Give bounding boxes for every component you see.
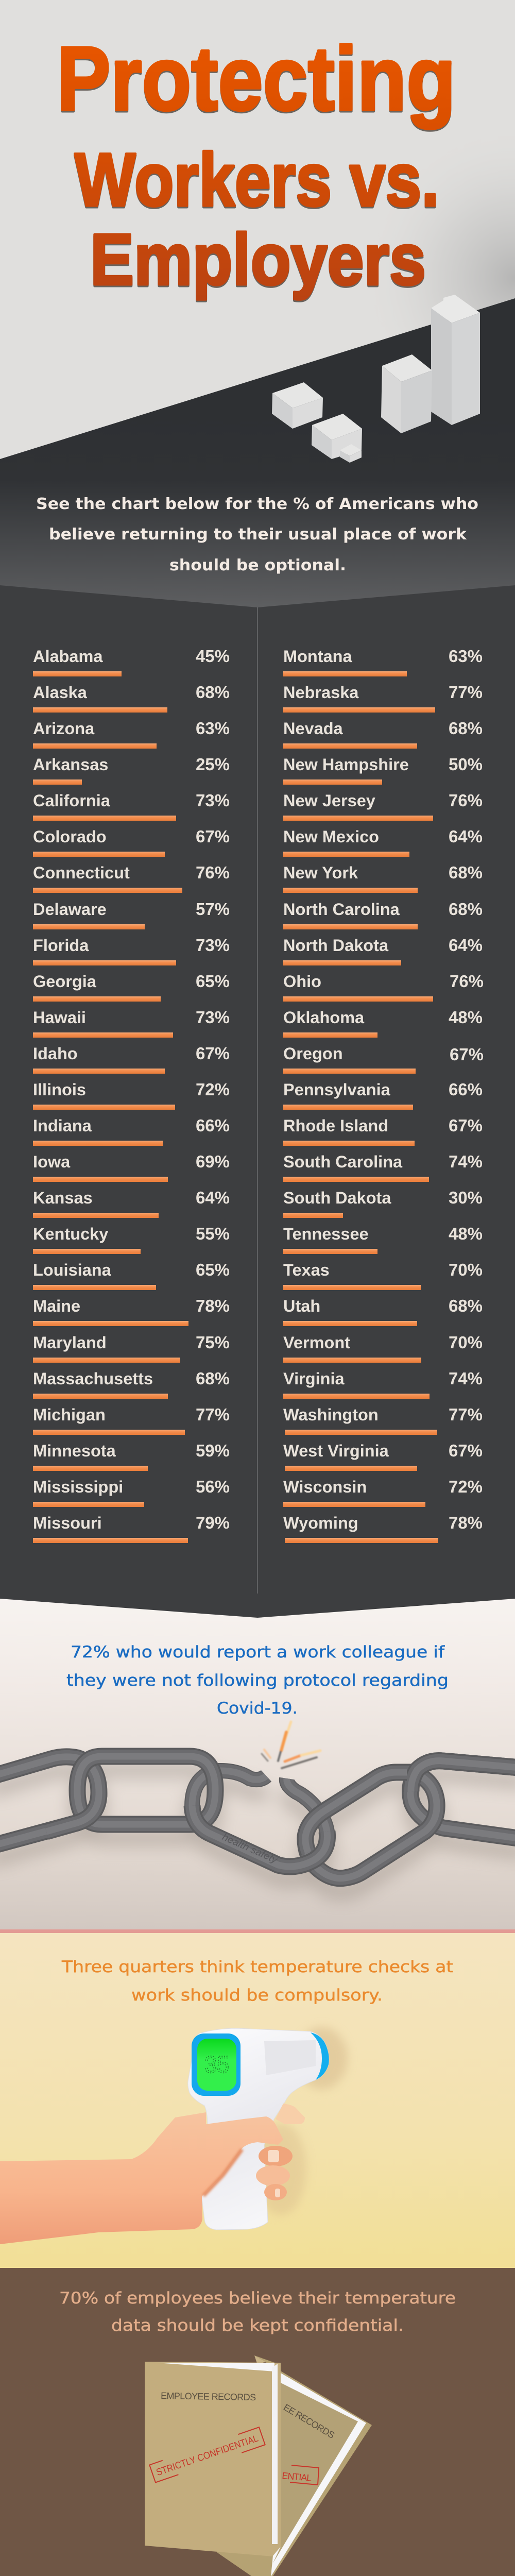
panel: state chart [0,585,515,1618]
icon: broken chain [0,1756,515,1892]
row: Pennsylvania: 66% [449,1080,483,1099]
heading: report a colleague: they were not following protocol regarding [66,1671,449,1690]
row: Indiana: 66% [196,1116,230,1135]
row: Alaska: 68% [196,683,230,702]
row: Nebraska: Nebraska [283,683,359,702]
row: Maryland: Maryland [33,1333,107,1352]
row: Pennsylvania: Pennsylvania [283,1080,391,1099]
row: Vermont [283,1333,483,1363]
icon: employee record folders: EMPLOYEE RECORDS [161,2391,256,2402]
row: Arkansas: Arkansas [33,755,108,774]
row: West Virginia: 67% [449,1441,483,1460]
row: Georgia: Georgia [33,972,97,991]
row: Minnesota: 59% [196,1441,230,1460]
row: South Dakota: South Dakota [283,1189,391,1207]
row: Nevada: Nevada [283,719,344,738]
row: Wyoming: Wyoming [283,1514,358,1532]
row: South Carolina [283,1152,483,1182]
row: West Virginia [283,1441,483,1471]
row: California: California [33,791,111,810]
row: Wisconsin [283,1477,483,1507]
row: Oklahoma [283,1008,483,1038]
row: West Virginia: West Virginia [283,1442,389,1460]
row: Ohio: Ohio [283,972,321,991]
row: Idaho: Idaho [33,1044,78,1063]
row: Tennessee: 48% [449,1224,483,1243]
row: Kansas: Kansas [33,1189,93,1207]
row: Massachusetts [33,1369,230,1399]
row: North Dakota [283,936,483,965]
row: Vermont: Vermont [283,1333,350,1352]
row: Missouri [33,1513,230,1543]
row: Alabama: 45% [196,647,230,666]
row: North Dakota: North Dakota [283,936,389,955]
row: Indiana: Indiana [33,1116,92,1135]
row: Arizona: Arizona [33,719,95,738]
row: Ohio [283,972,484,1002]
row: New Jersey [283,791,483,821]
intro text [36,495,478,574]
row: Mississippi: 56% [196,1477,230,1496]
row: Florida: Florida [33,936,89,955]
row: Utah: Utah [283,1297,320,1315]
row: Washington: Washington [283,1405,379,1424]
header background [0,0,515,618]
row: Michigan: Michigan [33,1405,106,1424]
row: South Dakota [283,1188,483,1218]
title: Employers [90,218,426,300]
row: California [33,791,230,821]
heading: report a colleague [66,1643,449,1718]
row: South Dakota: 30% [449,1188,483,1207]
row: Alabama: Alabama [33,647,103,666]
row: Missouri: 79% [196,1513,230,1532]
row: Connecticut [33,863,230,893]
row: Washington [283,1405,483,1435]
icon: hand holding thermometer [0,2027,348,2244]
row: Michigan: 77% [196,1405,230,1424]
row: Arizona: 63% [196,719,230,738]
row: Oklahoma: 48% [449,1008,483,1027]
row: New Mexico: New Mexico [283,827,379,846]
row: Pennsylvania [283,1080,483,1110]
row: Montana: Montana [283,647,353,666]
title [57,28,456,300]
row: Tennessee [283,1224,483,1254]
isometric bar blocks [272,295,480,463]
row: South Carolina: South Carolina [283,1153,403,1171]
row: Maine: Maine [33,1297,80,1315]
row: Wisconsin: 72% [449,1477,483,1496]
row: Iowa: 69% [196,1152,230,1171]
row: Utah: 68% [449,1296,483,1315]
row: Indiana [33,1116,230,1146]
panel: temperature section [0,1933,515,2268]
row: Massachusetts: 68% [196,1369,230,1388]
heading: temperature checks: Three quarters think temperature checks at [61,1958,453,1976]
row: Rhode Island: Rhode Island [283,1116,388,1135]
row: Hawaii: 73% [196,1008,230,1027]
row: North Carolina: 68% [449,900,483,919]
row: Kansas [33,1188,230,1218]
row: Iowa [33,1152,230,1182]
row: Arkansas [33,755,230,785]
icon: employee record folders: EE RECORDS [282,2402,336,2441]
heading: temperature checks [61,1958,453,2005]
row: Minnesota: Minnesota [33,1442,116,1460]
row: Missouri: Missouri [33,1514,102,1532]
row: Wisconsin: Wisconsin [283,1478,367,1496]
row: New Jersey: 76% [449,791,483,810]
icon: hand holding thermometer: 35 [204,2051,229,2078]
row: Virginia: Virginia [283,1369,345,1388]
row: Nevada: 68% [449,719,483,738]
row: Tennessee: Tennessee [283,1225,369,1243]
row: Montana: 63% [449,647,483,666]
row: Nebraska: 77% [449,683,483,702]
row: Florida [33,936,230,965]
icon: broken chain: health safety [220,1832,280,1866]
divider band [0,1929,515,1933]
row: Arizona [33,719,230,749]
row: Delaware: Delaware [33,900,107,919]
row: Georgia [33,972,230,1002]
row: North Dakota: 64% [449,936,483,955]
row: New York [283,863,483,893]
row: Oregon: 67% [450,1045,484,1064]
icon: employee record folders: ENTIAL [282,2470,312,2483]
row: Oregon [283,1044,484,1074]
heading: report a colleague: Covid-19. [217,1699,298,1718]
row: Maine: 78% [196,1296,230,1315]
icon: employee record folders [145,2355,372,2576]
row: North Carolina [283,900,483,929]
heading: data confidential [59,2289,456,2335]
row: Alaska [33,683,230,713]
row: New Hampshire: 50% [449,755,483,774]
row: California: 73% [196,791,230,810]
row: Kentucky: 55% [196,1224,230,1243]
row: Louisiana: Louisiana [33,1261,112,1279]
row: Louisiana: 65% [196,1260,230,1279]
row: New Hampshire [283,755,483,785]
row: Oklahoma: Oklahoma [283,1008,365,1027]
panel: confidential section [0,2268,515,2576]
row: Maryland [33,1333,230,1363]
row: Nevada [283,719,483,749]
intro text: See the chart below for the % of Americans who [36,495,478,513]
row: Rhode Island: 67% [449,1116,483,1135]
dark slanted floor [0,298,515,618]
row: Mississippi [33,1477,230,1507]
row: Hawaii: Hawaii [33,1008,86,1027]
row: Massachusetts: Massachusetts [33,1369,153,1388]
row: Kentucky [33,1224,230,1254]
row: Kentucky: Kentucky [33,1225,108,1243]
heading: data confidential: data should be kept confidential. [111,2316,404,2335]
row: New York: New York [283,863,358,882]
title: Protecting [57,28,456,129]
row: Virginia [283,1369,483,1399]
row: New Mexico [283,827,483,857]
row: Idaho [33,1044,230,1074]
row: Wyoming [283,1513,483,1543]
row: New Jersey: New Jersey [283,791,375,810]
row: Texas: Texas [283,1261,330,1279]
row: Mississippi: Mississippi [33,1478,123,1496]
row: Hawaii [33,1008,230,1038]
row: Delaware [33,900,230,929]
stamp: strictly confidential: STRICTLY CONFIDENTIAL [155,2433,260,2478]
row: Wyoming: 78% [449,1513,483,1532]
title: Workers vs. [75,138,439,222]
heading: temperature checks: work should be compulsory. [131,1986,383,2005]
intro text: should be optional. [169,556,346,574]
row: Illinois: Illinois [33,1080,86,1099]
row: Kansas: 64% [196,1188,230,1207]
row: Alabama [33,647,230,676]
row: Virginia: 74% [449,1369,483,1388]
row: Texas [283,1260,483,1290]
row: Maryland: 75% [196,1333,230,1352]
row: Montana [283,647,483,676]
row: Nebraska [283,683,483,713]
row: Connecticut: Connecticut [33,863,130,882]
heading: report a colleague: 72% who would report a work colleague if [71,1643,445,1662]
row: Colorado: 67% [196,827,230,846]
row: New Mexico: 64% [449,827,483,846]
row: Iowa: Iowa [33,1153,71,1171]
heading: data confidential: 70% of employees believe their temperature [59,2289,456,2308]
row: Delaware: 57% [196,900,230,919]
row: Louisiana [33,1260,230,1290]
row: Washington: 77% [449,1405,483,1424]
row: Florida: 73% [196,936,230,955]
row: Illinois: 72% [196,1080,230,1099]
row: Illinois [33,1080,230,1110]
row: Georgia: 65% [196,972,230,991]
row: New York: 68% [449,863,483,882]
row: Michigan [33,1405,230,1435]
row: Ohio: 76% [450,972,484,991]
row: North Carolina: North Carolina [283,900,400,919]
row: South Carolina: 74% [449,1152,483,1171]
intro text: believe returning to their usual place of work [49,526,467,544]
row: Texas: 70% [449,1260,483,1279]
row: Idaho: 67% [196,1044,230,1063]
row: Alaska: Alaska [33,683,88,702]
row: New Hampshire: New Hampshire [283,755,409,774]
row: Oregon: Oregon [283,1044,343,1063]
row: Utah [283,1296,483,1326]
row: Colorado: Colorado [33,827,107,846]
icon: sparks [262,1722,320,1768]
row: Rhode Island [283,1116,483,1146]
row: Minnesota [33,1441,230,1471]
row: Maine [33,1296,230,1326]
panel: chain section background [0,1592,515,1929]
row: Connecticut: 76% [196,863,230,882]
row: Vermont: 70% [449,1333,483,1352]
row: Arkansas: 25% [196,755,230,774]
row: Colorado [33,827,230,857]
